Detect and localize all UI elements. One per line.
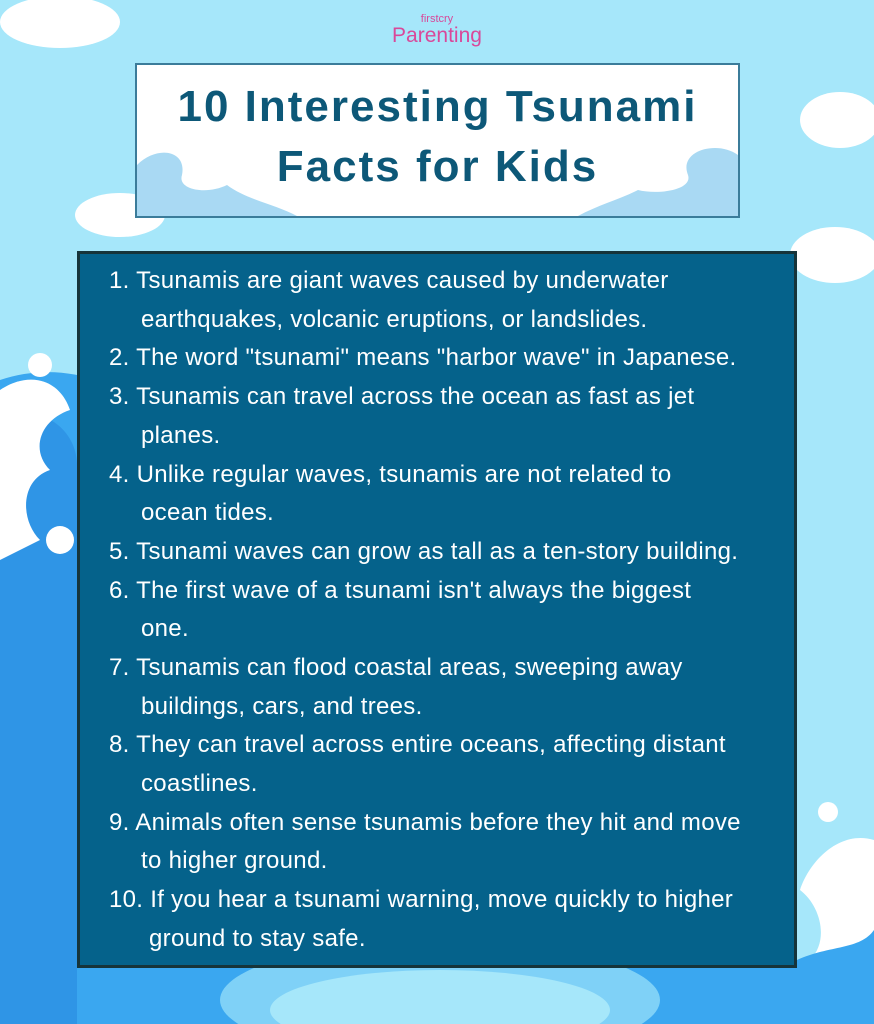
panel: facts: 10. If you hear a tsunami warning, move quickly to higher: [109, 886, 733, 913]
panel: facts: 1. Tsunamis are giant waves caused by underwater: [109, 267, 669, 294]
panel: facts: 2. The word "tsunami" means "harbor wave" in Japanese.: [109, 344, 736, 371]
title: 10 Interesting Tsunami: [178, 82, 697, 131]
panel: facts: 8. They can travel across entire oceans, affecting distant: [109, 731, 726, 758]
panel: facts: ocean tides.: [141, 499, 274, 526]
icon: wave right: [578, 148, 738, 216]
logo: firstcry: [421, 13, 453, 25]
big wave body: [0, 372, 874, 1024]
icon: wave left: [137, 152, 297, 216]
foam left: [0, 380, 70, 560]
panel: facts: earthquakes, volcanic eruptions, or landslides.: [141, 306, 647, 333]
panel: facts: 9. Animals often sense tsunamis before they hit and move: [109, 809, 741, 836]
panel: facts: 5. Tsunami waves can grow as tall as a ten-story building.: [109, 538, 738, 565]
clouds: [0, 0, 120, 48]
title: Facts for Kids: [277, 142, 598, 191]
logo: [392, 13, 482, 47]
panel: facts: buildings, cars, and trees.: [141, 693, 423, 720]
panel: facts: 4. Unlike regular waves, tsunamis are not related to: [109, 461, 672, 488]
title: [178, 82, 697, 191]
panel: facts: one.: [141, 615, 189, 642]
foam right: [800, 838, 874, 960]
panel: facts: planes.: [141, 422, 220, 449]
title box: [135, 63, 740, 218]
panel: facts: [77, 251, 797, 968]
panel: facts: 7. Tsunamis can flood coastal areas, sweeping away: [109, 654, 683, 681]
panel: facts: ground to stay safe.: [149, 925, 366, 952]
panel: facts: coastlines.: [141, 770, 258, 797]
inner swirl: [220, 940, 660, 1024]
panel: facts: to higher ground.: [141, 847, 328, 874]
panel: facts: 6. The first wave of a tsunami isn't always the biggest: [109, 577, 691, 604]
panel: facts: 3. Tsunamis can travel across the ocean as fast as jet: [109, 383, 694, 410]
logo: Parenting: [392, 24, 482, 47]
